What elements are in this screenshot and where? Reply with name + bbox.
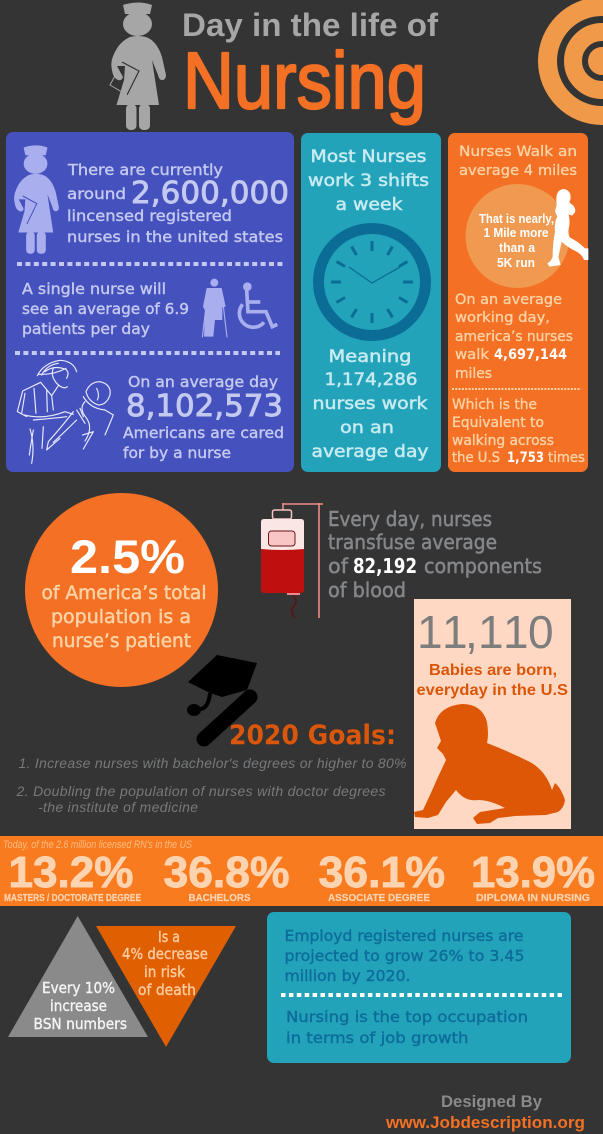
icon: crawling baby <box>414 704 565 824</box>
icon: graduation cap and diploma <box>187 655 257 739</box>
text: Americans cared for: 8,102,573 <box>126 389 283 424</box>
heading: nurses walk 4 miles: average 4 miles <box>459 163 577 179</box>
illustration: nurse caring for patient <box>17 360 113 463</box>
text: blood components: components <box>424 554 542 578</box>
text: blood components: of blood <box>328 578 406 602</box>
text: daily miles: walk <box>455 347 490 363</box>
text: daily miles <box>455 292 573 382</box>
text: registered nurses stat: There are currently <box>67 161 223 179</box>
triangle: BSN numbers: Every 10% <box>42 979 115 997</box>
text: projected growth: million by 2020. <box>284 967 410 985</box>
list: 2020 goals <box>16 755 406 815</box>
stat: associate: 36.1% <box>318 848 445 897</box>
text: daily miles: 4,697,144 <box>494 347 567 363</box>
caption: babies are born <box>416 662 568 699</box>
icon: concentric rings <box>538 0 603 125</box>
text: patients per day: see an average of 6.9 <box>22 300 189 318</box>
panel: nurse population <box>6 132 294 472</box>
footer credit: Designed By <box>441 1092 543 1111</box>
title line: Day in the life of: Day in the life of <box>182 7 438 43</box>
icon: IV blood bag <box>261 503 323 618</box>
text: Americans cared for: for by a nurse <box>123 444 231 462</box>
text: patients per day: patients per day <box>22 320 150 338</box>
callout: 2.5% of population circle <box>25 493 218 687</box>
callout: 5K comparison circle <box>466 184 570 288</box>
text: nurses on an average day: nurses work <box>312 394 428 414</box>
text: nurses on an average day: average day <box>312 442 428 462</box>
caption: babies are born: everyday in the U.S <box>416 682 568 699</box>
header <box>110 0 603 130</box>
triangle: risk of death: Is a <box>158 928 180 946</box>
icon: runner <box>547 189 588 267</box>
band: education breakdown <box>0 836 603 906</box>
text: blood components: of <box>328 554 349 578</box>
stat: masters / doctorate: 13.2% <box>8 848 134 897</box>
icon: clock <box>318 228 426 336</box>
list: 2020 goals: 1. Increase nurses with bachelor's degrees or higher to 80% <box>18 755 406 771</box>
icon: grey nurse with clipboard <box>110 2 166 130</box>
stat: associate: ASSOCIATE DEGREE <box>328 893 430 904</box>
footer credit <box>385 1092 585 1132</box>
panel: job growth <box>267 912 571 1063</box>
heading: most nurses work 3 shifts: Most Nurses <box>310 147 427 167</box>
text: daily miles: america’s nurses <box>455 329 573 345</box>
list: 2020 goals: -the institute of medicine <box>38 799 198 815</box>
title: Nursing: Nursing <box>183 36 426 125</box>
text: patients per day: A single nurse will <box>22 280 166 298</box>
callout: 5K comparison circle: 1 Mile more <box>484 226 549 240</box>
triangle: BSN numbers: BSN numbers <box>34 1015 127 1033</box>
text: patients per day <box>22 280 189 338</box>
text: across the U.S: Equivalent to <box>452 415 544 431</box>
triangle: risk of death: in risk <box>144 963 185 981</box>
heading: most nurses work 3 shifts: a week <box>336 195 403 215</box>
heading: 2020 Goals: 2020 Goals: <box>229 720 396 751</box>
text: registered nurses stat: 2,600,000 <box>131 176 289 211</box>
icon: wheelchair <box>239 282 277 327</box>
panel: miles walked <box>448 133 588 472</box>
icon: blue nurse <box>14 145 59 254</box>
stat: bachelors: 36.8% <box>164 848 290 897</box>
text: Americans cared for: Americans are cared <box>123 424 284 442</box>
text: Americans cared for <box>123 373 284 462</box>
panel: babies born <box>414 599 571 829</box>
callout: 2.5% of population circle: nurse’s patient <box>52 630 191 652</box>
text: across the U.S: Which is the <box>452 397 537 413</box>
callout: 2.5% of population circle: 2.5% <box>70 530 185 583</box>
text: registered nurses stat: lincensed registered <box>67 207 232 225</box>
text: top occupation: in terms of job growth <box>286 1029 468 1047</box>
caption: babies are born: Babies are born, <box>429 662 557 679</box>
stat: diploma: 13.9% <box>471 848 595 897</box>
triangle: risk of death: of death <box>138 981 196 999</box>
text: across the U.S <box>452 397 585 466</box>
stat: 11,110: 11,110 <box>417 606 554 658</box>
text: nurses on an average day: Meaning <box>328 347 412 367</box>
text: daily miles: working day, <box>455 310 550 326</box>
heading: most nurses work 3 shifts: work 3 shifts <box>308 171 429 191</box>
text: projected growth: Employd registered nurses are <box>284 927 524 945</box>
text: nurses on an average day: on an <box>340 418 394 438</box>
text: blood components <box>328 507 542 602</box>
triangle: risk of death: 4% decrease <box>122 945 208 963</box>
triangle: BSN numbers: increase <box>50 997 107 1015</box>
callout: 2.5% of population circle: of America’s total <box>42 582 206 604</box>
text: blood components: 82,192 <box>353 554 417 578</box>
callout: 2.5% of population circle: population is a <box>51 606 191 628</box>
text: daily miles: miles <box>455 366 492 382</box>
text: registered nurses stat: nurses in the united states <box>67 228 283 246</box>
text: across the U.S: walking across <box>452 433 554 449</box>
callout: 5K comparison circle: That is nearly, <box>479 212 554 226</box>
text: Americans cared for: On an average day <box>128 373 278 391</box>
heading: most nurses work 3 shifts <box>308 147 429 215</box>
text: top occupation <box>286 1008 528 1047</box>
text: registered nurses stat: around <box>67 185 126 203</box>
triangle: BSN numbers <box>8 916 148 1037</box>
stat: diploma: DIPLOMA IN NURSING <box>476 893 590 904</box>
heading: nurses walk 4 miles: Nurses Walk an <box>459 144 577 160</box>
footer credit: www.Jobdescription.org <box>385 1113 585 1132</box>
band intro text: Today, of the 2.6 million licensed RN's in the US <box>3 839 193 851</box>
text: blood components: transfuse average <box>328 530 497 554</box>
text: top occupation: Nursing is the top occupation <box>286 1008 528 1026</box>
icon: patient on crutches <box>202 279 227 337</box>
callout: 5K comparison circle: than a <box>499 241 536 255</box>
callout: 5K comparison circle: 5K run <box>497 256 535 270</box>
panel: shifts per week <box>301 133 441 472</box>
text: across the U.S: the U.S <box>452 450 500 466</box>
list: 2020 goals: 2. Doubling the population of nurses with doctor degrees <box>16 783 386 799</box>
heading: nurses walk 4 miles <box>459 144 577 179</box>
text: projected growth: projected to grow 26% to 3.45 <box>284 947 524 965</box>
text: registered nurses stat <box>67 161 289 246</box>
text: across the U.S: 1,753 <box>507 450 544 466</box>
text: blood components: Every day, nurses <box>328 507 492 531</box>
stat: bachelors: BACHELORS <box>188 893 251 904</box>
triangle: risk of death <box>96 926 236 1047</box>
text: nurses on an average day: 1,174,286 <box>324 370 418 390</box>
text: projected growth <box>284 927 524 985</box>
text: across the U.S: times <box>548 450 585 466</box>
stat: masters / doctorate: MASTERS / DOCTORATE DEGREE <box>4 893 141 904</box>
text: daily miles: On an average <box>455 292 562 308</box>
text: nurses on an average day <box>312 347 428 462</box>
